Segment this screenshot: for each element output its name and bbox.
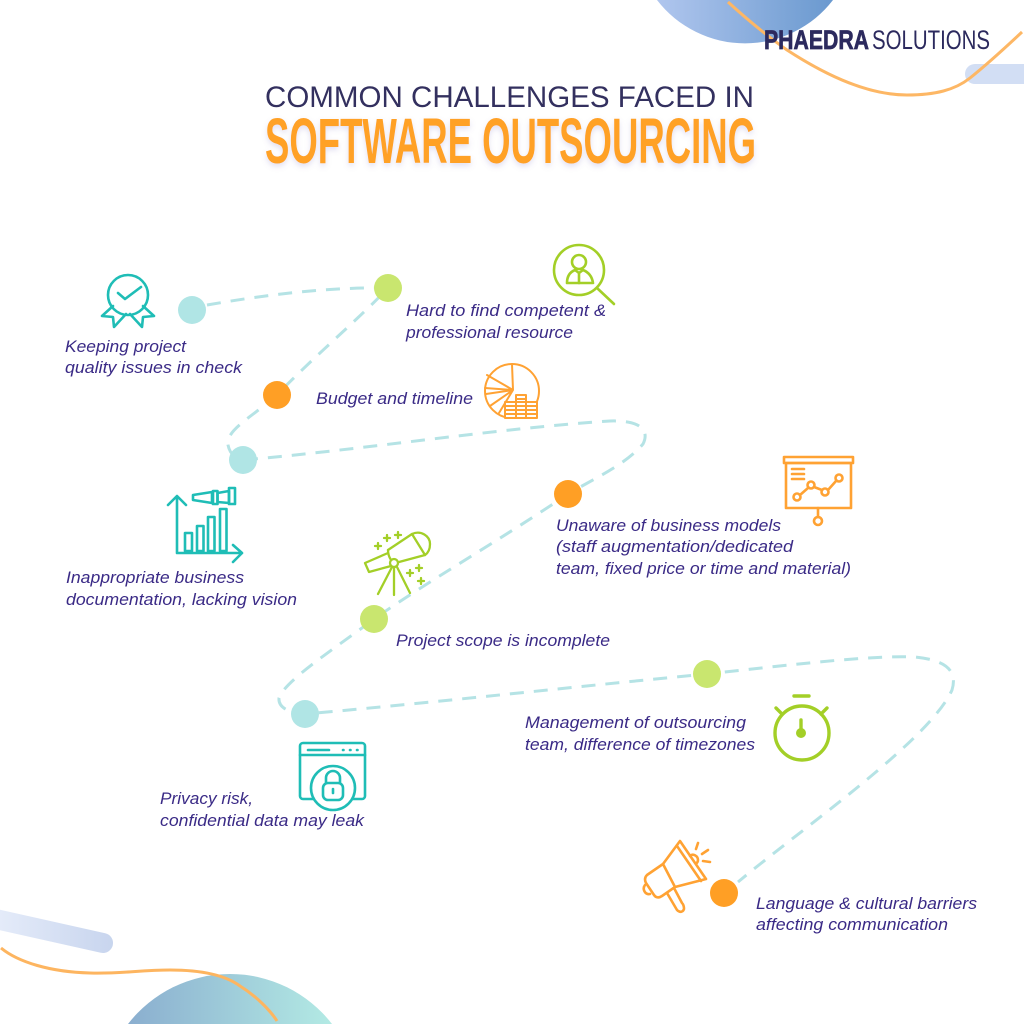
icon: person in magnifier bbox=[554, 245, 614, 304]
label: business documentation: documentation, lacking vision bbox=[66, 590, 297, 609]
label: quality issues: quality issues in check bbox=[65, 358, 244, 377]
label: management of team: Management of outsourcing bbox=[525, 713, 747, 732]
icon: stopwatch bbox=[775, 696, 829, 760]
decorative bottom circle bbox=[128, 974, 332, 1024]
label: privacy risk: Privacy risk, bbox=[160, 789, 253, 808]
logo bbox=[764, 25, 990, 55]
label: privacy risk bbox=[160, 789, 366, 830]
decorative top pill bbox=[965, 64, 1024, 84]
icon: pie chart with coins bbox=[485, 364, 539, 418]
label: business models: (staff augmentation/dedicated bbox=[556, 537, 794, 556]
label: management of team: team, difference of timezones bbox=[525, 735, 756, 754]
title: COMMON CHALLENGES FACED IN bbox=[265, 81, 754, 114]
logo: PHAEDRA bbox=[764, 25, 869, 55]
label: competent resource: professional resource bbox=[405, 323, 573, 342]
decorative bottom curve bbox=[1, 948, 277, 1021]
label: business models bbox=[556, 516, 851, 578]
label: competent resource bbox=[405, 301, 606, 342]
dot 9 bbox=[710, 879, 738, 907]
icon: telescope bbox=[365, 532, 430, 595]
logo: SOLUTIONS bbox=[872, 25, 990, 55]
label: language barriers bbox=[756, 894, 978, 934]
label: business models: team, fixed price or time and material) bbox=[556, 559, 851, 578]
dashed path bbox=[207, 288, 953, 882]
dot 6 bbox=[360, 605, 388, 633]
label: language barriers: Language & cultural barriers bbox=[756, 894, 978, 913]
label: language barriers: affecting communication bbox=[756, 915, 948, 934]
label: business documentation: Inappropriate business bbox=[66, 568, 245, 587]
icon: presentation board bbox=[784, 457, 853, 525]
icon: megaphone bbox=[644, 841, 710, 912]
icon: browser window with lock bbox=[300, 743, 365, 810]
dot 1 bbox=[178, 296, 206, 324]
label: privacy risk: confidential data may leak bbox=[160, 811, 366, 830]
dot 8 bbox=[693, 660, 721, 688]
dot 5 bbox=[554, 480, 582, 508]
icon: chart with binoculars bbox=[168, 488, 242, 562]
label: quality issues bbox=[65, 337, 244, 377]
decorative bottom pill bbox=[0, 910, 113, 953]
label: project scope: Project scope is incomplete bbox=[396, 631, 610, 650]
label: business models: Unaware of business models bbox=[556, 516, 782, 535]
dot 3 bbox=[263, 381, 291, 409]
label: competent resource: Hard to find competent & bbox=[406, 301, 606, 320]
dot 4 bbox=[229, 446, 257, 474]
label: budget and timeline: Budget and timeline bbox=[316, 389, 473, 408]
label: business documentation bbox=[66, 568, 297, 609]
label: management of team bbox=[525, 713, 756, 754]
icon: award badge bbox=[102, 275, 154, 327]
dot 2 bbox=[374, 274, 402, 302]
title bbox=[265, 81, 756, 177]
label: quality issues: Keeping project bbox=[65, 337, 187, 356]
decorative top circle bbox=[657, 0, 833, 43]
dot 7 bbox=[291, 700, 319, 728]
decorative top curve bbox=[728, 2, 1022, 95]
